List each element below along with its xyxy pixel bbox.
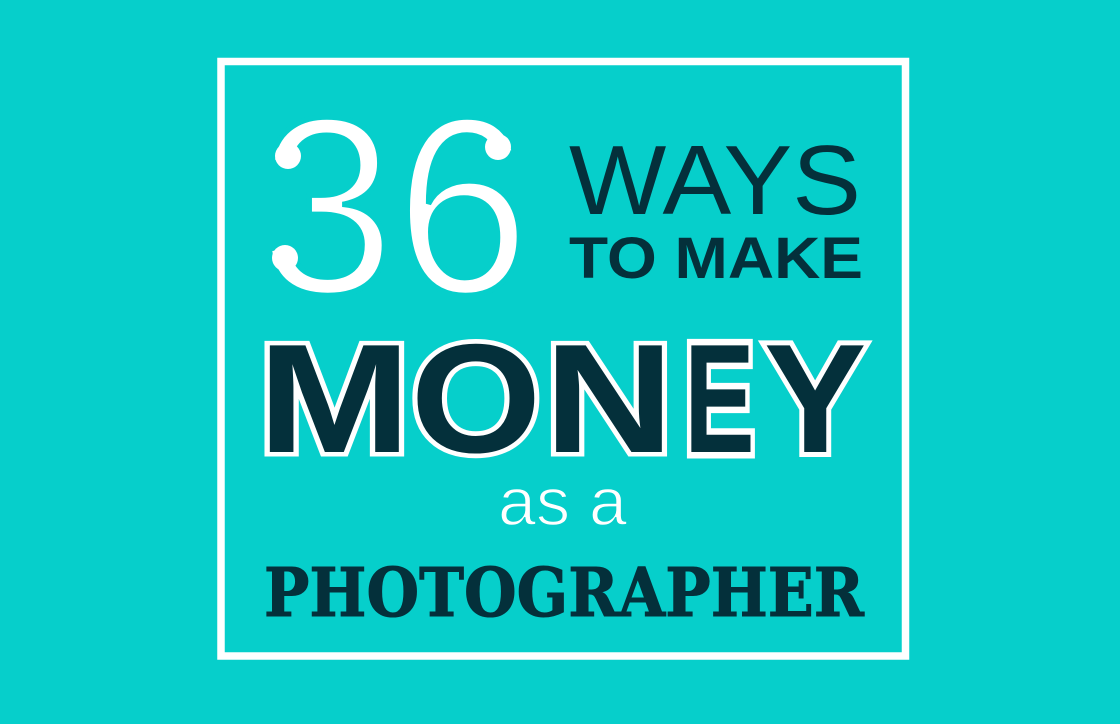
- heading: MONEY: O: [411, 313, 541, 486]
- text: as a: as a: [498, 464, 627, 540]
- number 36: 36: [260, 66, 530, 347]
- heading: WAYS: WAYS: [569, 125, 861, 235]
- heading: MONEY: Y: [764, 311, 866, 485]
- heading: PHOTOGRAPHER: PHOTOGRAPHER: [264, 553, 865, 632]
- heading: MONEY: E: [684, 313, 755, 486]
- heading: TO MAKE: TO MAKE: [569, 226, 863, 291]
- white frame: [221, 62, 906, 656]
- heading: MONEY: [258, 311, 866, 486]
- heading: MONEY: N: [544, 312, 674, 485]
- heading: MONEY: M: [258, 313, 411, 486]
